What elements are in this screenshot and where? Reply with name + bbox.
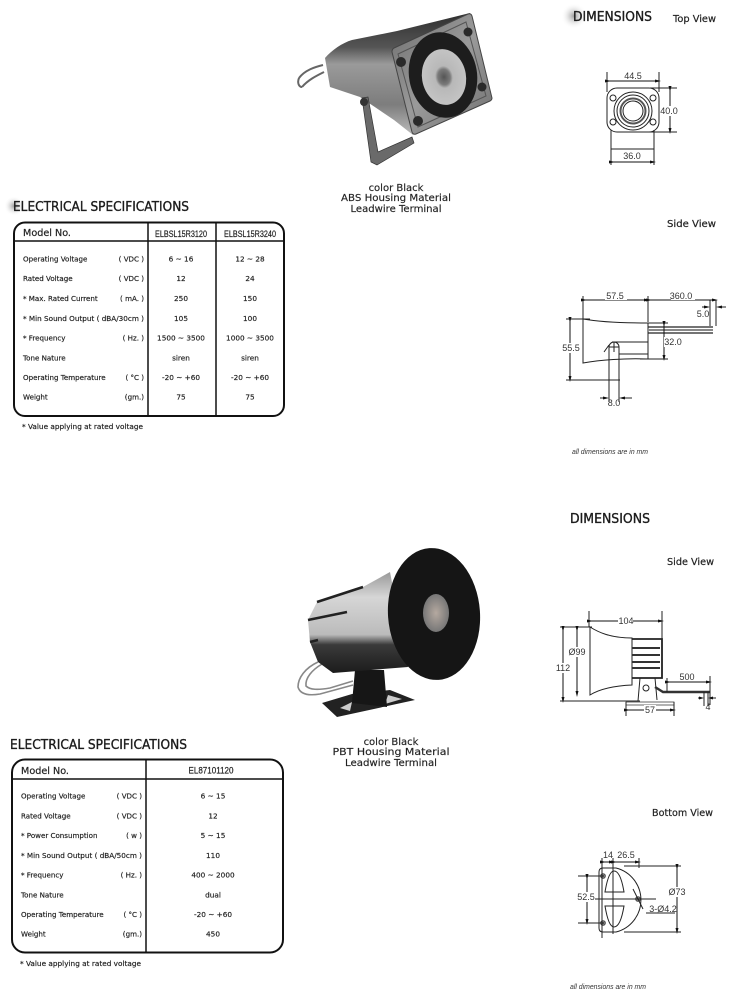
diagram: side view bottom: 112 bbox=[556, 663, 570, 673]
caption: ABS speaker: ABS Housing Material bbox=[341, 193, 451, 204]
table: specifications bottom: 450 bbox=[206, 930, 220, 938]
diagram: side view: 32.0 bbox=[664, 337, 682, 347]
diagram: side view: 360.0 bbox=[670, 291, 692, 301]
caption: ABS speaker bbox=[341, 183, 451, 215]
table: specifications top: ( Hz. ) bbox=[123, 334, 144, 342]
table: specifications top: ( VDC ) bbox=[119, 254, 144, 264]
caption: PBT speaker: PBT Housing Material bbox=[332, 747, 450, 758]
label: top view: Top View bbox=[672, 14, 716, 25]
diagram: bottom view: 3-Ø4.2 bbox=[649, 904, 677, 914]
diagram: top view: 40.0 bbox=[660, 106, 678, 116]
table: specifications bottom: Operating Voltage bbox=[21, 792, 85, 800]
note: units top: all dimensions are in mm bbox=[572, 449, 648, 456]
table: specifications bottom: Operating Temperature bbox=[21, 910, 104, 919]
table: specifications bottom: EL87101120 bbox=[188, 766, 234, 776]
diagram: side view bottom: Ø99 bbox=[568, 647, 586, 657]
diagram: top view: 36.0 bbox=[623, 151, 641, 161]
table: specifications top: 105 bbox=[174, 314, 188, 323]
table: specifications top: 250 bbox=[174, 294, 188, 303]
table: specifications bottom: 12 bbox=[208, 812, 218, 820]
table: specifications top: 75 bbox=[176, 392, 186, 402]
table: specifications top: 1500 ~ 3500 bbox=[157, 334, 205, 342]
table: specifications top: ( VDC ) bbox=[119, 274, 144, 283]
table: specifications top: 24 bbox=[245, 274, 255, 283]
table: specifications top: * Min Sound Output ( dBA/30cm ) bbox=[23, 314, 144, 323]
table: specifications top: 100 bbox=[243, 314, 257, 323]
table: specifications top: Model No. bbox=[23, 228, 71, 239]
table: specifications bottom: * Frequency bbox=[21, 870, 63, 880]
caption: ABS speaker: Leadwire Terminal bbox=[350, 204, 442, 215]
table: specifications bottom: dual bbox=[205, 890, 221, 900]
diagram: top view bbox=[607, 71, 678, 165]
diagram: side view bottom: 500 bbox=[679, 672, 695, 682]
diagram: side view bottom: 104 bbox=[618, 616, 634, 626]
table: specifications top: ( mA. ) bbox=[120, 294, 144, 303]
table: specifications top: (gm.) bbox=[125, 392, 144, 402]
label: bottom view: Bottom View bbox=[652, 808, 713, 819]
caption: PBT speaker bbox=[332, 737, 450, 769]
table: specifications top: 1000 ~ 3500 bbox=[226, 334, 274, 342]
table: specifications top: * Frequency bbox=[23, 334, 65, 342]
table: specifications top: 12 bbox=[176, 274, 186, 283]
table: specifications bottom bbox=[12, 759, 283, 953]
table: specifications top: 12 ~ 28 bbox=[235, 254, 265, 264]
table: specifications bottom: 400 ~ 2000 bbox=[191, 870, 235, 880]
diagram: bottom view: Ø73 bbox=[668, 887, 686, 897]
footnote top: * Value applying at rated voltage bbox=[22, 423, 143, 431]
caption: PBT speaker: color Black bbox=[364, 737, 419, 748]
diagram: side view: 5.0 bbox=[697, 309, 709, 319]
table: specifications bottom: ( VDC ) bbox=[117, 792, 142, 800]
table: specifications bottom: 5 ~ 15 bbox=[201, 831, 225, 840]
diagram: top view: 44.5 bbox=[624, 71, 642, 81]
diagram: bottom view: 14 bbox=[603, 850, 613, 860]
diagram: side view bottom: 57 bbox=[645, 705, 655, 715]
table: specifications top: Operating Voltage bbox=[23, 254, 87, 264]
diagram: side view bottom: 4 bbox=[705, 702, 711, 712]
table: specifications bottom: -20 ~ +60 bbox=[194, 910, 232, 919]
table: specifications top: Weight bbox=[23, 392, 48, 402]
table: specifications bottom: Rated Voltage bbox=[21, 812, 71, 820]
table: specifications top: siren bbox=[172, 354, 190, 362]
note: units bottom: all dimensions are in mm bbox=[570, 984, 646, 991]
table: specifications top: ( °C ) bbox=[125, 373, 144, 382]
table: specifications top: Operating Temperature bbox=[23, 373, 106, 382]
table: specifications top: Rated Voltage bbox=[23, 274, 73, 283]
table: specifications top: -20 ~ +60 bbox=[231, 373, 269, 382]
table: specifications bottom: ( VDC ) bbox=[117, 812, 142, 820]
table: specifications top: ELBSL15R3240 bbox=[224, 229, 276, 239]
heading: electrical specifications bottom: ELECTRICAL SPECIFICATIONS bbox=[10, 738, 187, 753]
heading: electrical specifications top bbox=[4, 196, 189, 216]
table: specifications bottom: Model No. bbox=[21, 766, 69, 777]
table: specifications bottom: 6 ~ 15 bbox=[201, 792, 225, 800]
diagram: side view: 55.5 bbox=[562, 343, 580, 353]
heading: electrical specifications top: ELECTRICAL SPECIFICATIONS bbox=[13, 200, 189, 215]
table: specifications top: 6 ~ 16 bbox=[169, 254, 194, 264]
table: specifications bottom: Weight bbox=[21, 930, 46, 938]
product photo: PBT horn speaker bbox=[298, 545, 484, 717]
product photo: ABS horn speaker bbox=[298, 13, 492, 165]
table: specifications bottom: ( °C ) bbox=[123, 910, 142, 919]
diagram: bottom view: 52.5 bbox=[577, 892, 595, 902]
diagram: side view: 8.0 bbox=[608, 398, 620, 408]
table: specifications top: 75 bbox=[245, 392, 255, 402]
label: side view bottom: Side View bbox=[667, 557, 714, 568]
caption: ABS speaker: color Black bbox=[369, 183, 424, 194]
table: specifications bottom: 110 bbox=[206, 851, 220, 860]
table: specifications top: ELBSL15R3120 bbox=[155, 229, 207, 239]
table: specifications top: -20 ~ +60 bbox=[162, 373, 200, 382]
diagram: side view: 57.5 bbox=[606, 291, 624, 301]
table: specifications top: Tone Nature bbox=[22, 354, 66, 362]
table: specifications top: siren bbox=[241, 354, 259, 362]
table: specifications top: 150 bbox=[243, 294, 257, 303]
table: specifications bottom: ( Hz. ) bbox=[121, 870, 142, 880]
label: side view: Side View bbox=[667, 219, 716, 230]
heading: dimensions bottom: DIMENSIONS bbox=[570, 512, 650, 527]
table: specifications bottom: (gm.) bbox=[123, 930, 142, 938]
table: specifications bottom: * Min Sound Output ( dBA/50cm ) bbox=[21, 851, 142, 860]
table: specifications bottom: Tone Nature bbox=[20, 890, 64, 900]
diagram: bottom view bbox=[577, 850, 686, 938]
caption: PBT speaker: Leadwire Terminal bbox=[345, 758, 437, 769]
table: specifications top bbox=[14, 222, 284, 416]
table: specifications top: * Max. Rated Current bbox=[23, 294, 98, 303]
footnote bottom: * Value applying at rated voltage bbox=[20, 960, 141, 968]
diagram: bottom view: 26.5 bbox=[617, 850, 635, 860]
table: specifications bottom: ( w ) bbox=[126, 831, 142, 840]
diagram: side view bbox=[562, 291, 726, 408]
heading: dimensions top bbox=[561, 3, 652, 29]
table: specifications bottom: * Power Consumption bbox=[21, 831, 98, 840]
diagram: side view bottom bbox=[556, 611, 716, 716]
heading: dimensions top: DIMENSIONS bbox=[573, 10, 652, 25]
